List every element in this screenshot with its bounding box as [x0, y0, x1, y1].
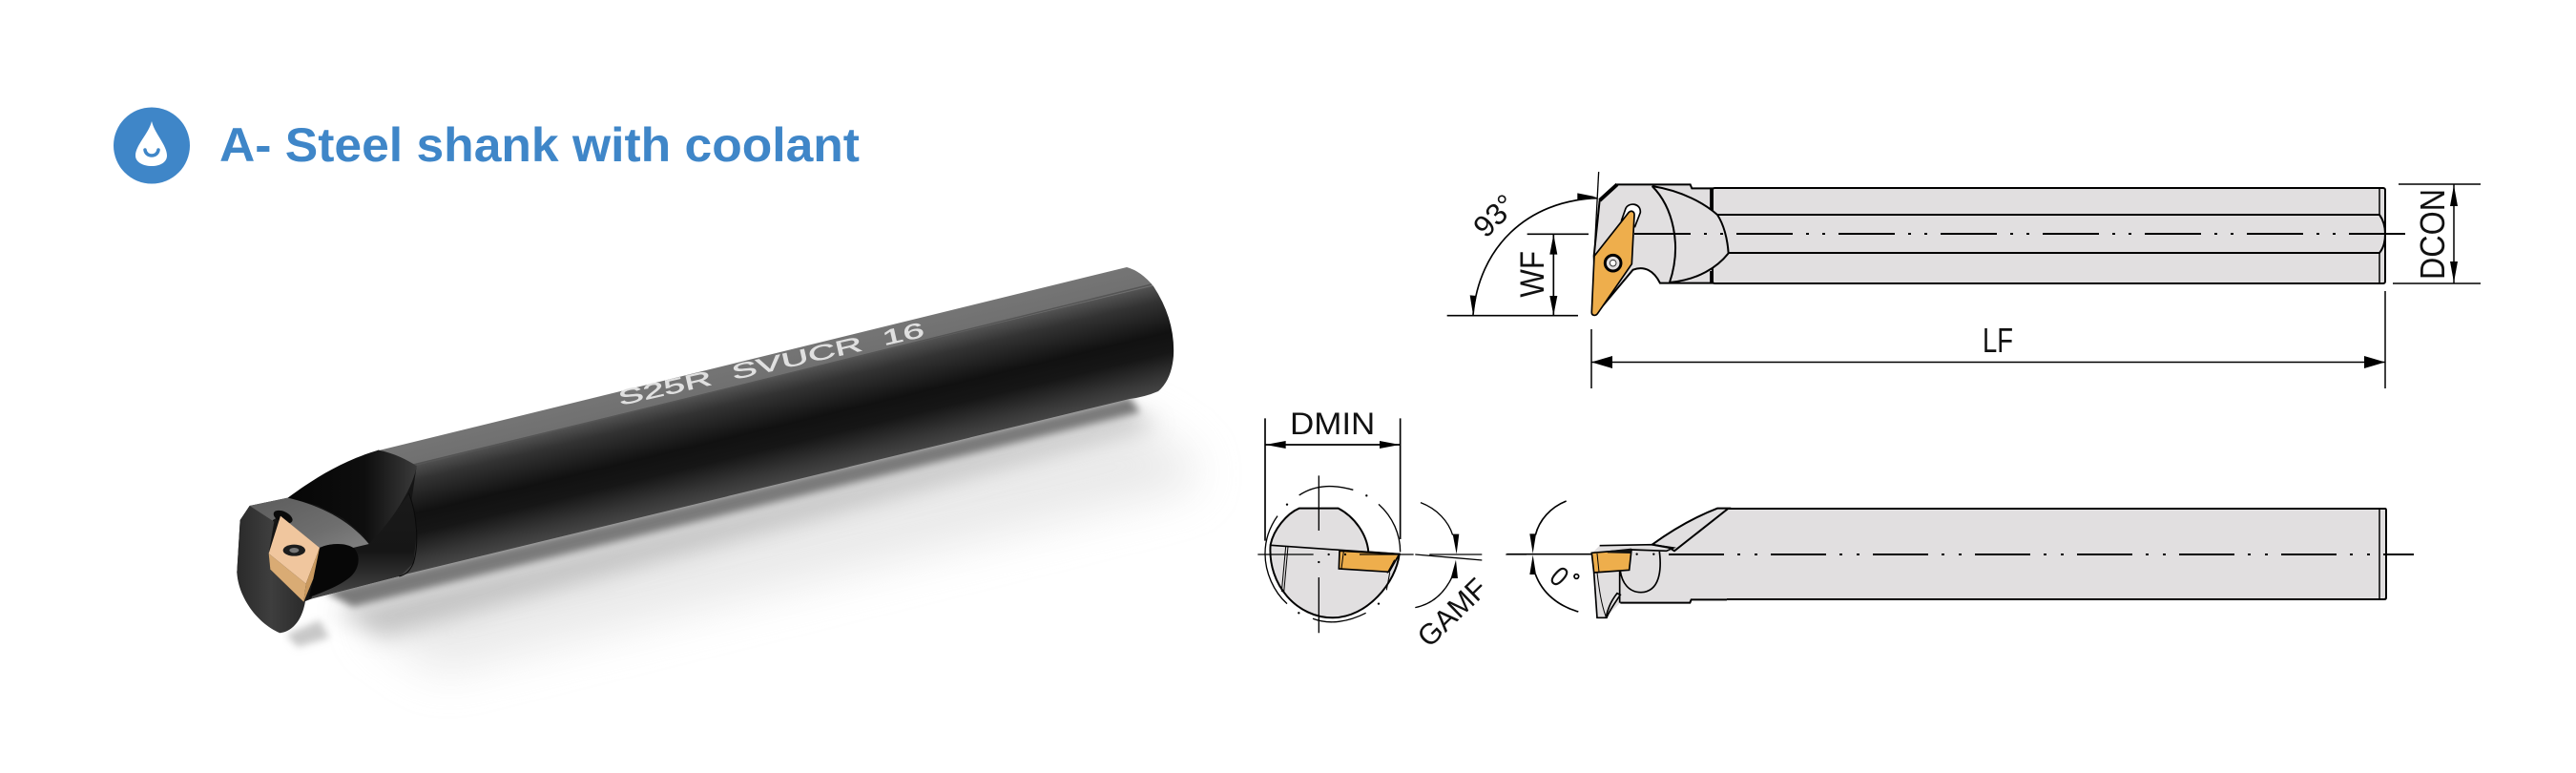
top face	[250, 498, 369, 554]
GAMF arrows	[1453, 534, 1459, 554]
WF dimension: WF	[1514, 251, 1551, 298]
neck	[312, 493, 417, 598]
93 degree dimension: 93°	[1466, 187, 1523, 244]
insert	[269, 516, 320, 602]
left face	[237, 506, 305, 633]
tool head top view	[1447, 172, 1729, 316]
GAMF label: GAMF	[1411, 573, 1494, 654]
DCON dimension	[2393, 184, 2481, 283]
shank side view	[1679, 509, 2386, 599]
drawing: top view	[1447, 172, 2481, 388]
centre line	[1669, 554, 2414, 555]
DMIN dimension	[1265, 407, 1401, 541]
coolant slot	[1621, 204, 1640, 227]
drawing: end view	[1257, 407, 1527, 654]
cut line	[1271, 545, 1400, 554]
product render: boring bar	[237, 267, 1197, 673]
insert top view	[1591, 211, 1634, 315]
WF dimension	[1514, 234, 1589, 316]
LF dimension	[1591, 291, 2385, 388]
shank marking: S25R SVUCR 16	[616, 318, 926, 410]
shank top view	[1713, 188, 2385, 283]
DCON dimension: DCON	[2413, 189, 2452, 280]
insert side view	[1591, 550, 1631, 573]
93 degree dimension	[1447, 172, 1599, 316]
icon: water drop	[114, 107, 190, 183]
DMIN dimension: DMIN	[1290, 407, 1375, 441]
ground shadow	[286, 397, 1197, 673]
centre line	[1634, 233, 2405, 235]
head base	[237, 450, 417, 633]
tool head	[237, 450, 417, 633]
title: A- Steel shank with coolant	[219, 118, 860, 172]
drawing: side view	[1506, 501, 2414, 617]
under-insert pocket	[309, 544, 359, 597]
insert end view	[1339, 551, 1400, 572]
section body	[1270, 509, 1400, 617]
zero degree dimension	[1506, 501, 1591, 612]
flat edge highlight	[417, 284, 1152, 465]
coolant slot	[272, 508, 295, 526]
tool head side view	[1506, 501, 1729, 617]
zero degree dimension: 0	[1544, 561, 1574, 594]
shank cylinder with flat	[379, 267, 1174, 575]
joint line	[399, 493, 417, 576]
chip pocket	[288, 450, 417, 544]
section details	[1257, 475, 1527, 633]
section title with coolant icon	[114, 107, 860, 183]
LF dimension: LF	[1983, 321, 2013, 360]
